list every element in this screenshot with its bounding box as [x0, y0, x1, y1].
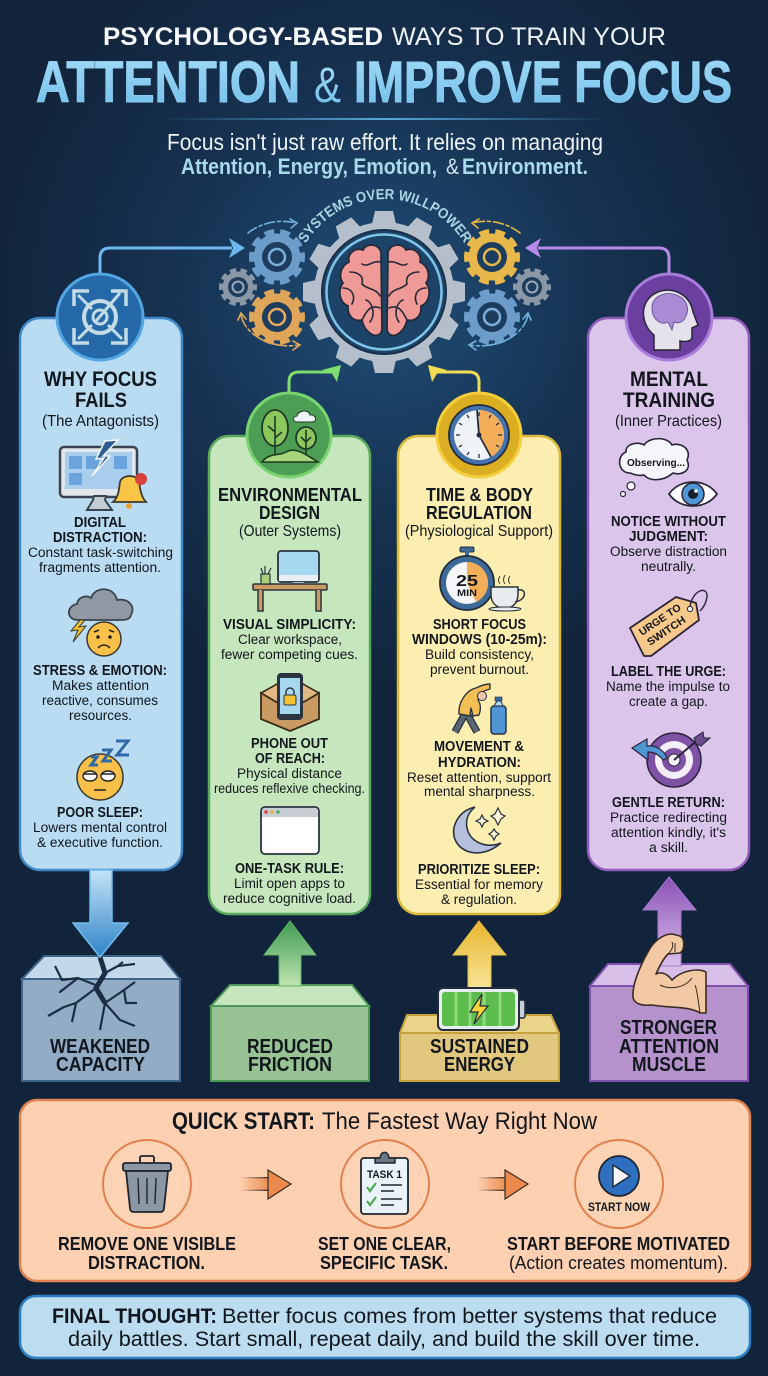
- text: set one clear specific task: SPECIFIC TASK.: [320, 1253, 448, 1273]
- text: start before motivated: [507, 1234, 730, 1273]
- heading: DESIGN: [259, 502, 320, 523]
- panel: quick start: [20, 1100, 750, 1281]
- text: movement and hydration: HYDRATION:: [438, 755, 521, 771]
- text: start before motivated: START BEFORE MOTIVATED: [507, 1234, 730, 1254]
- arrow: up from stronger attention muscle: [643, 877, 696, 966]
- text: remove one visible distraction: [58, 1234, 236, 1273]
- icon: sleepy face and zzz: [77, 741, 129, 800]
- text: short focus windows: WINDOWS (10-25m):: [412, 632, 547, 648]
- heading: [615, 368, 722, 430]
- heading: TRAINING: [623, 389, 715, 412]
- heading: [172, 1108, 598, 1135]
- text: final thought: [52, 1304, 717, 1351]
- icon: main gear: [303, 211, 465, 373]
- outcome: weakened capacity: [22, 956, 180, 1081]
- icon: trash can: [103, 1140, 191, 1228]
- heading: (Physiological Support): [405, 523, 553, 540]
- title: WAYS TO TRAIN YOUR: [392, 23, 666, 51]
- text: final thought: FINAL THOUGHT:: [52, 1304, 217, 1328]
- heading: QUICK START:: [172, 1108, 315, 1135]
- text: one-task rule: Limit open apps to: [234, 876, 345, 892]
- text: set one clear specific task: [318, 1234, 451, 1273]
- arrow: blue connector to gears: [100, 238, 245, 274]
- icon: start now play button: START NOW: [588, 1202, 650, 1214]
- text: phone out of reach: reduces reflexive checking.: [214, 781, 365, 797]
- arrow: purple connector to gears: [525, 238, 669, 274]
- crack: [48, 957, 137, 1030]
- text: gentle return: Practice redirecting: [610, 810, 727, 826]
- central gear hub with brain: [219, 189, 551, 373]
- heading: WHY FOCUS: [44, 368, 157, 391]
- curved label: systems over willpower: SYSTEMS OVER WILLPOWER: [298, 189, 472, 244]
- text: digital distraction: DISTRACTION:: [53, 530, 147, 546]
- icon: head with brain: [626, 274, 712, 360]
- text: poor sleep: Lowers mental control: [33, 820, 167, 836]
- icon: gray gear left: [222, 270, 254, 304]
- icon: thought cloud and eye: [620, 439, 717, 506]
- text: visual simplicity: [221, 617, 358, 663]
- icon: flexed arm: [633, 934, 706, 1013]
- text: notice without judgment: [610, 514, 727, 575]
- text: digital distraction: DIGITAL: [74, 515, 126, 531]
- text: visual simplicity: Clear workspace,: [238, 632, 342, 648]
- text: gentle return: GENTLE RETURN:: [612, 795, 725, 811]
- text: gentle return: [610, 795, 727, 856]
- icon: battery: [438, 988, 525, 1030]
- icon: yellow gear top right: [468, 232, 516, 282]
- heading: ENVIRONMENTAL: [218, 484, 362, 505]
- text: movement and hydration: [407, 739, 551, 800]
- text: prioritize sleep: PRIORITIZE SLEEP:: [418, 862, 540, 878]
- icon: start now play button: [575, 1140, 663, 1228]
- heading: (Inner Practices): [615, 413, 722, 430]
- text: final thought: daily battles. Start small, repeat daily, and build the skill over time.: [68, 1327, 700, 1351]
- heading: (Outer Systems): [239, 523, 341, 540]
- text: remove one visible distraction: DISTRACTION.: [88, 1253, 205, 1273]
- icon: scattered target: [57, 274, 143, 360]
- label: FRICTION: [248, 1054, 332, 1076]
- outcome: reduced friction: [211, 985, 369, 1081]
- panel: mental training: [588, 274, 749, 870]
- icon: clock: [437, 393, 521, 477]
- text: phone out of reach: PHONE OUT: [251, 736, 328, 752]
- panel: time and body regulation: [398, 393, 560, 914]
- text: start before motivated: (Action creates momentum).: [509, 1253, 728, 1273]
- arrow: up from sustained energy: [453, 921, 506, 990]
- text: visual simplicity: fewer competing cues.: [221, 647, 358, 663]
- icon: trees and cloud: [247, 393, 331, 477]
- text: poor sleep: POOR SLEEP:: [57, 805, 143, 821]
- heading: [218, 484, 362, 540]
- label: [247, 1036, 333, 1076]
- icon: gray gear right: [516, 270, 548, 304]
- heading: [42, 368, 159, 430]
- label: WEAKENED: [50, 1036, 150, 1058]
- icon: desk with monitor: [253, 551, 327, 611]
- icon: urge to switch tag: SWITCH: [645, 614, 688, 648]
- text: short focus windows: prevent burnout.: [430, 662, 529, 678]
- label: [50, 1036, 150, 1076]
- text: digital distraction: Constant task-switching: [28, 545, 173, 561]
- label: ATTENTION: [619, 1036, 719, 1058]
- icon: urge to switch tag: [630, 590, 707, 656]
- text: phone out of reach: OF REACH:: [255, 751, 325, 767]
- heading: FAILS: [75, 389, 127, 412]
- arrow: green connector to gear: [289, 365, 341, 393]
- icon: thought cloud and eye: Observing...: [627, 457, 685, 469]
- text: label the urge: LABEL THE URGE:: [611, 664, 726, 680]
- text: phone out of reach: Physical distance: [237, 766, 342, 782]
- arrow: step two to three: [477, 1170, 528, 1199]
- panel: why focus fails: [20, 274, 182, 870]
- text: remove one visible distraction: REMOVE ONE VISIBLE: [58, 1234, 236, 1254]
- rotation arrows around gears: [238, 219, 531, 350]
- text: gentle return: attention kindly, it's: [611, 825, 726, 841]
- icon: stretching figure and water bottle: [455, 684, 506, 734]
- panel: final thought: [20, 1296, 750, 1358]
- icon: brain: [340, 245, 429, 335]
- text: stress and emotion: resources.: [69, 708, 132, 724]
- heading: [405, 484, 553, 540]
- label: SUSTAINED: [430, 1036, 529, 1058]
- heading: The Fastest Way Right Now: [322, 1108, 598, 1135]
- text: notice without judgment: NOTICE WITHOUT: [611, 514, 726, 530]
- icon: storm cloud and worried face: [69, 589, 133, 656]
- text: short focus windows: [412, 617, 547, 678]
- icon: task clipboard: TASK 1: [367, 1169, 402, 1181]
- panel: environmental design: [209, 393, 370, 914]
- heading: TIME & BODY: [426, 484, 534, 505]
- outcome: sustained energy: [400, 1015, 559, 1081]
- title: PSYCHOLOGY-BASED: [103, 23, 383, 51]
- subtitle: Environment.: [462, 154, 588, 179]
- icon: moon and stars: [454, 807, 505, 853]
- title: ATTENTION: [36, 50, 300, 115]
- text: short focus windows: SHORT FOCUS: [433, 617, 526, 633]
- text: movement and hydration: mental sharpness.: [424, 784, 535, 800]
- icon: monitor, lightning and bell: [60, 440, 147, 510]
- text: label the urge: create a gap.: [629, 694, 708, 710]
- text: movement and hydration: Reset attention, support: [407, 770, 551, 786]
- label: CAPACITY: [56, 1054, 146, 1076]
- arrow: up from reduced friction: [264, 921, 316, 986]
- text: digital distraction: fragments attention.: [39, 560, 161, 576]
- text: one-task rule: reduce cognitive load.: [223, 891, 356, 907]
- text: stress and emotion: reactive, consumes: [42, 693, 158, 709]
- heading: (The Antagonists): [42, 413, 159, 430]
- arrow: down to weakened capacity: [73, 870, 128, 957]
- text: notice without judgment: JUDGMENT:: [629, 529, 708, 545]
- label: ENERGY: [444, 1054, 516, 1076]
- icon: orange gear bottom left: [252, 292, 302, 342]
- text: movement and hydration: MOVEMENT &: [434, 739, 524, 755]
- icon: blue gear bottom right: [468, 292, 516, 342]
- text: one-task rule: [223, 861, 356, 907]
- arrow: step one to two: [240, 1170, 291, 1199]
- label: STRONGER: [620, 1017, 717, 1039]
- icon: 25 minute stopwatch and coffee cup: MIN: [457, 588, 477, 598]
- arrow: yellow connector to gear: [428, 365, 479, 393]
- text: short focus windows: Build consistency,: [425, 647, 534, 663]
- subtitle: [167, 129, 603, 179]
- heading: REGULATION: [426, 502, 532, 523]
- text: prioritize sleep: [415, 862, 544, 908]
- icon: 25 minute stopwatch and coffee cup: [440, 547, 524, 611]
- text: stress and emotion: [33, 663, 167, 724]
- subtitle: &: [446, 154, 459, 179]
- icon: urge to switch tag: URGE TO: [637, 602, 683, 638]
- text: digital distraction: [28, 515, 173, 576]
- icon: phone in box: [261, 673, 319, 731]
- text: set one clear specific task: SET ONE CLEAR,: [318, 1234, 451, 1254]
- text: final thought: Better focus comes from better systems that reduce: [222, 1304, 717, 1328]
- text: notice without judgment: neutrally.: [641, 559, 696, 575]
- subtitle: Focus isn't just raw effort. It relies on managing: [167, 129, 603, 155]
- text: label the urge: Name the impulse to: [606, 679, 730, 695]
- heading: MENTAL: [630, 368, 708, 391]
- title: [36, 23, 732, 115]
- text: stress and emotion: STRESS & EMOTION:: [33, 663, 167, 679]
- text: stress and emotion: Makes attention: [52, 678, 149, 694]
- text: notice without judgment: Observe distraction: [610, 544, 727, 560]
- icon: blue gear top left: [252, 232, 302, 282]
- text: phone out of reach: [214, 736, 365, 797]
- outcome: stronger attention muscle: [590, 964, 748, 1081]
- label: REDUCED: [247, 1036, 333, 1058]
- text: label the urge: [606, 664, 730, 710]
- text: poor sleep: [33, 805, 167, 851]
- icon: single browser window: [261, 807, 319, 854]
- text: prioritize sleep: & regulation.: [441, 892, 517, 908]
- icon: target with return arrow: [632, 732, 710, 787]
- text: visual simplicity: VISUAL SIMPLICITY:: [223, 617, 356, 633]
- text: one-task rule: ONE-TASK RULE:: [235, 861, 344, 877]
- icon: task clipboard: [341, 1140, 429, 1228]
- label: MUSCLE: [632, 1054, 706, 1076]
- icon: 25 minute stopwatch and coffee cup: 25: [456, 573, 478, 590]
- text: prioritize sleep: Essential for memory: [415, 877, 544, 893]
- title: &: [314, 57, 341, 113]
- text: poor sleep: & executive function.: [37, 835, 163, 851]
- text: gentle return: a skill.: [649, 840, 688, 856]
- subtitle: Attention, Energy, Emotion,: [181, 154, 437, 179]
- label: [430, 1036, 529, 1076]
- label: [619, 1017, 719, 1076]
